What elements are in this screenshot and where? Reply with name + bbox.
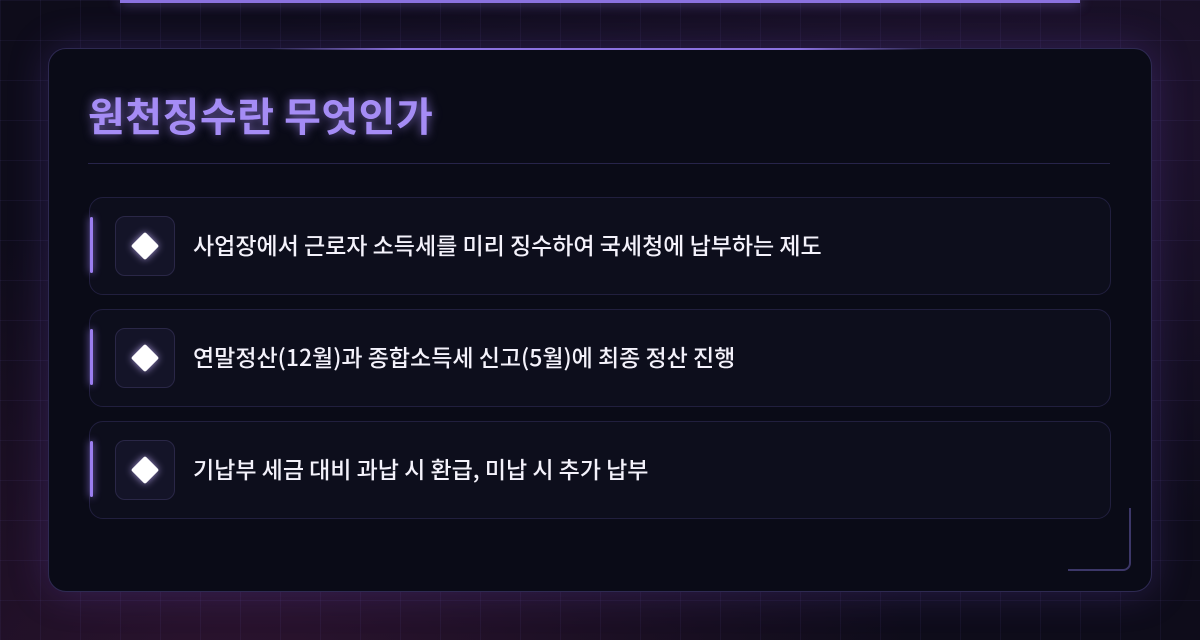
text 2: 연말정산(12월)과 종합소득세 신고(5월)에 최종 정산 진행 — [193, 339, 735, 373]
item 2 — [89, 309, 1111, 407]
title: 원천징수란 무엇인가 — [88, 85, 433, 143]
corner bracket — [1068, 508, 1131, 571]
text 3: 기납부 세금 대비 과납 시 환급, 미납 시 추가 납부 — [193, 451, 648, 485]
item 3 — [89, 421, 1111, 519]
panel: main card — [48, 48, 1152, 592]
item 1 — [89, 197, 1111, 295]
icon: diamond — [115, 328, 175, 388]
icon: diamond — [115, 440, 175, 500]
text 1: 사업장에서 근로자 소득세를 미리 징수하여 국세청에 납부하는 제도 — [193, 227, 822, 261]
top glow bar — [120, 0, 1080, 3]
icon: diamond — [115, 216, 175, 276]
